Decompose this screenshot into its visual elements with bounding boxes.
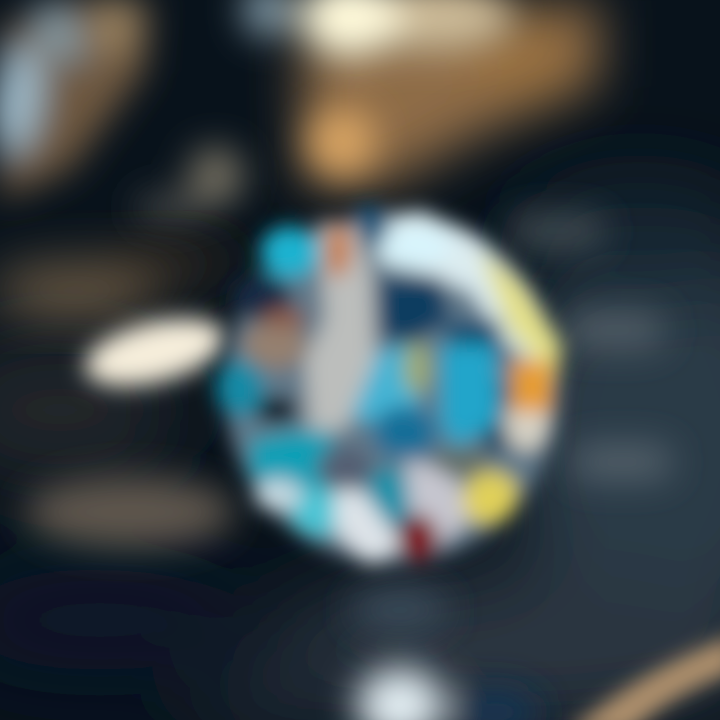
- dark blue facets: [232, 274, 511, 455]
- grey and white facets: [254, 220, 549, 566]
- gem body: [224, 212, 560, 564]
- cyan facets: [216, 226, 500, 536]
- lower-left tan object: [25, 476, 235, 548]
- slate table surface: [0, 180, 720, 720]
- orange hot spot: [308, 108, 376, 176]
- warm facets: [243, 222, 552, 535]
- grey blur near gem: [134, 146, 244, 224]
- dark and red accents: [255, 396, 438, 562]
- gemstone: [216, 205, 562, 566]
- cream highlight: [242, 0, 515, 58]
- top-right warm glow: [300, 0, 600, 185]
- top-left tan and blue object: [0, 0, 150, 200]
- bottom-right tan edge: [565, 635, 720, 720]
- white arc and yellow rim: [350, 205, 562, 382]
- white pill highlight: [78, 305, 232, 399]
- bottom reflection: [356, 667, 541, 720]
- left mid brown band: [0, 246, 240, 318]
- faint table labels: [350, 215, 672, 632]
